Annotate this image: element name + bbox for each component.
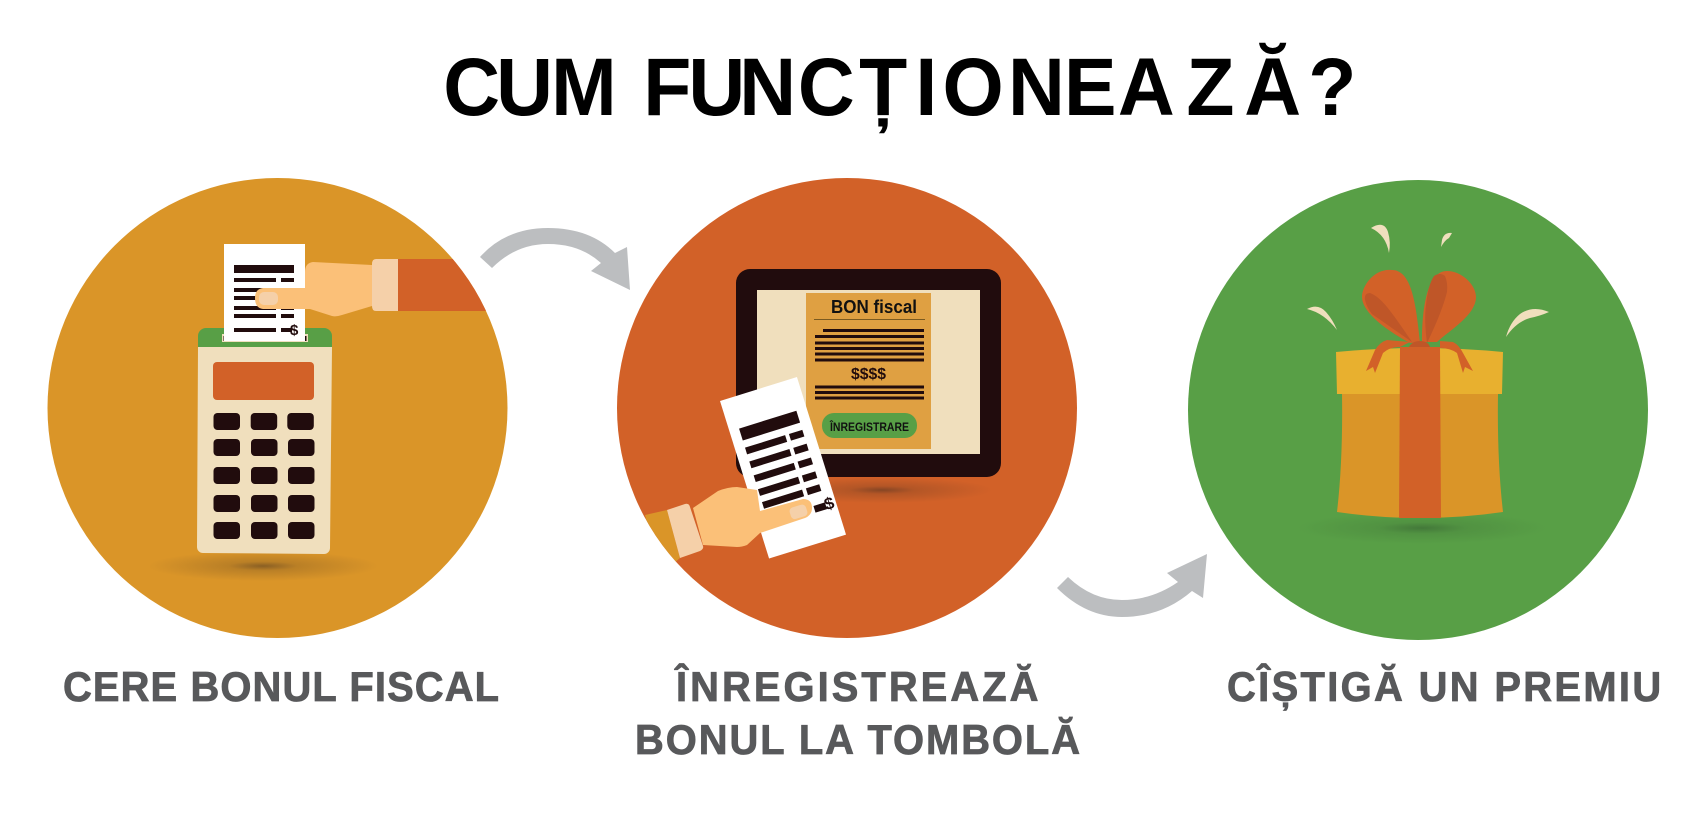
label: step 2 — [635, 663, 1080, 763]
icon: cash register — [197, 328, 332, 554]
icon: shadow under gift — [1297, 512, 1547, 544]
icon: hand holding tilted receipt — [645, 487, 812, 562]
arrow: step 2 to step 3 — [1057, 554, 1207, 617]
icon: paper receipt — [224, 244, 305, 341]
title: CUM FUNCȚIONEAZĂ? — [443, 42, 1356, 133]
button: inregistrare — [822, 413, 917, 438]
heading: bon fiscal: BON fiscal — [831, 296, 917, 317]
icon: celebration sparks — [1307, 225, 1549, 337]
circle: step 3 background — [1188, 180, 1648, 640]
panel: step 3 castiga un premiu — [1188, 180, 1648, 640]
label: step 3: CÎȘTIGĂ UN PREMIU — [1227, 663, 1661, 710]
panel: online fiscal receipt form — [806, 293, 931, 449]
icon: paper receipt: $ — [290, 322, 299, 339]
label: step 2: BONUL LA TOMBOLĂ — [635, 716, 1080, 763]
icon: paper receipt tilted — [720, 377, 846, 559]
circle: step 2 background — [617, 178, 1077, 638]
icon: gift box — [1336, 270, 1503, 518]
circle: step 1 background — [48, 178, 508, 638]
arrow: step 1 to step 2 — [480, 228, 630, 290]
panel: step 1 cere bonul fiscal — [48, 178, 528, 638]
label: step 1: CERE BONUL FISCAL — [63, 663, 499, 710]
panel: step 2 inregistreaza — [617, 178, 1077, 638]
label: step 2: ÎNREGISTREAZĂ — [674, 663, 1038, 710]
icon: tablet — [736, 269, 1001, 477]
text: amount: $$$$ — [851, 366, 886, 383]
icon: paper receipt tilted: $ — [822, 493, 837, 514]
icon: shadow under cash register — [148, 551, 378, 581]
button: inregistrare: ÎNREGISTRARE — [829, 419, 909, 434]
icon: shadow under tablet — [772, 477, 992, 503]
icon: hand holding receipt — [255, 259, 486, 316]
